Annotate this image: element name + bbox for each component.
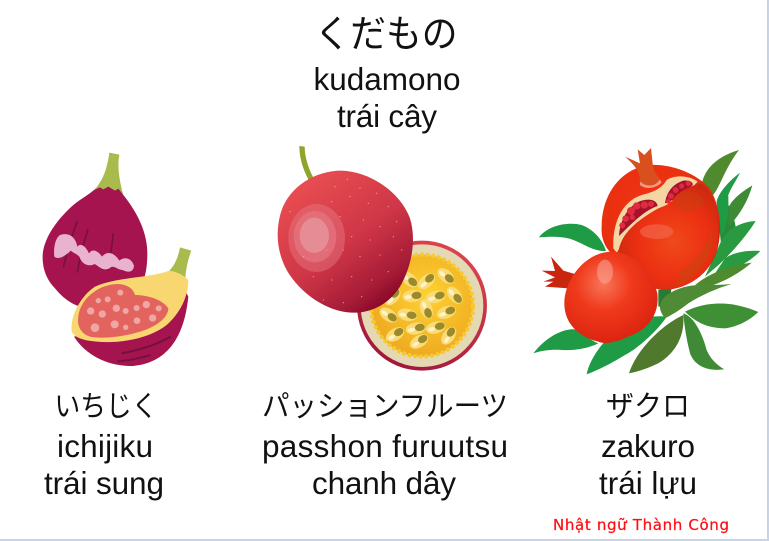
title: kudamono — [314, 61, 460, 97]
back pomegranate — [602, 148, 720, 290]
label: pomegranate: zakuro — [601, 428, 695, 464]
illustration: pomegranate — [533, 148, 760, 374]
label: passion fruit: chanh dây — [312, 465, 456, 501]
whole fruit — [278, 171, 413, 313]
label: pomegranate — [599, 391, 697, 501]
label: passion fruit — [262, 391, 508, 501]
label: passion fruit: passhon furuutsu — [262, 428, 508, 464]
title: trái cây — [337, 98, 437, 134]
label: fig: いちじく — [54, 391, 158, 423]
opened seeds — [613, 176, 698, 253]
title: くだもの — [314, 14, 458, 56]
watermark: Nhật ngữ Thành Công — [553, 516, 729, 534]
illustration: fig — [43, 153, 191, 366]
label: fig: trái sung — [44, 465, 164, 501]
cut half — [357, 241, 487, 371]
label: fig: ichijiku — [57, 428, 153, 464]
stem — [299, 146, 313, 180]
label: pomegranate: trái lựu — [599, 465, 697, 501]
front pomegranate — [542, 252, 658, 343]
crown — [625, 148, 660, 185]
title — [314, 14, 460, 134]
center leaf — [660, 284, 732, 318]
label: pomegranate: ザクロ — [606, 391, 690, 423]
leaves — [533, 150, 760, 374]
label: passion fruit: パッションフルーツ — [262, 391, 508, 423]
label: fig — [44, 391, 164, 501]
illustration: passion fruit — [278, 146, 487, 371]
